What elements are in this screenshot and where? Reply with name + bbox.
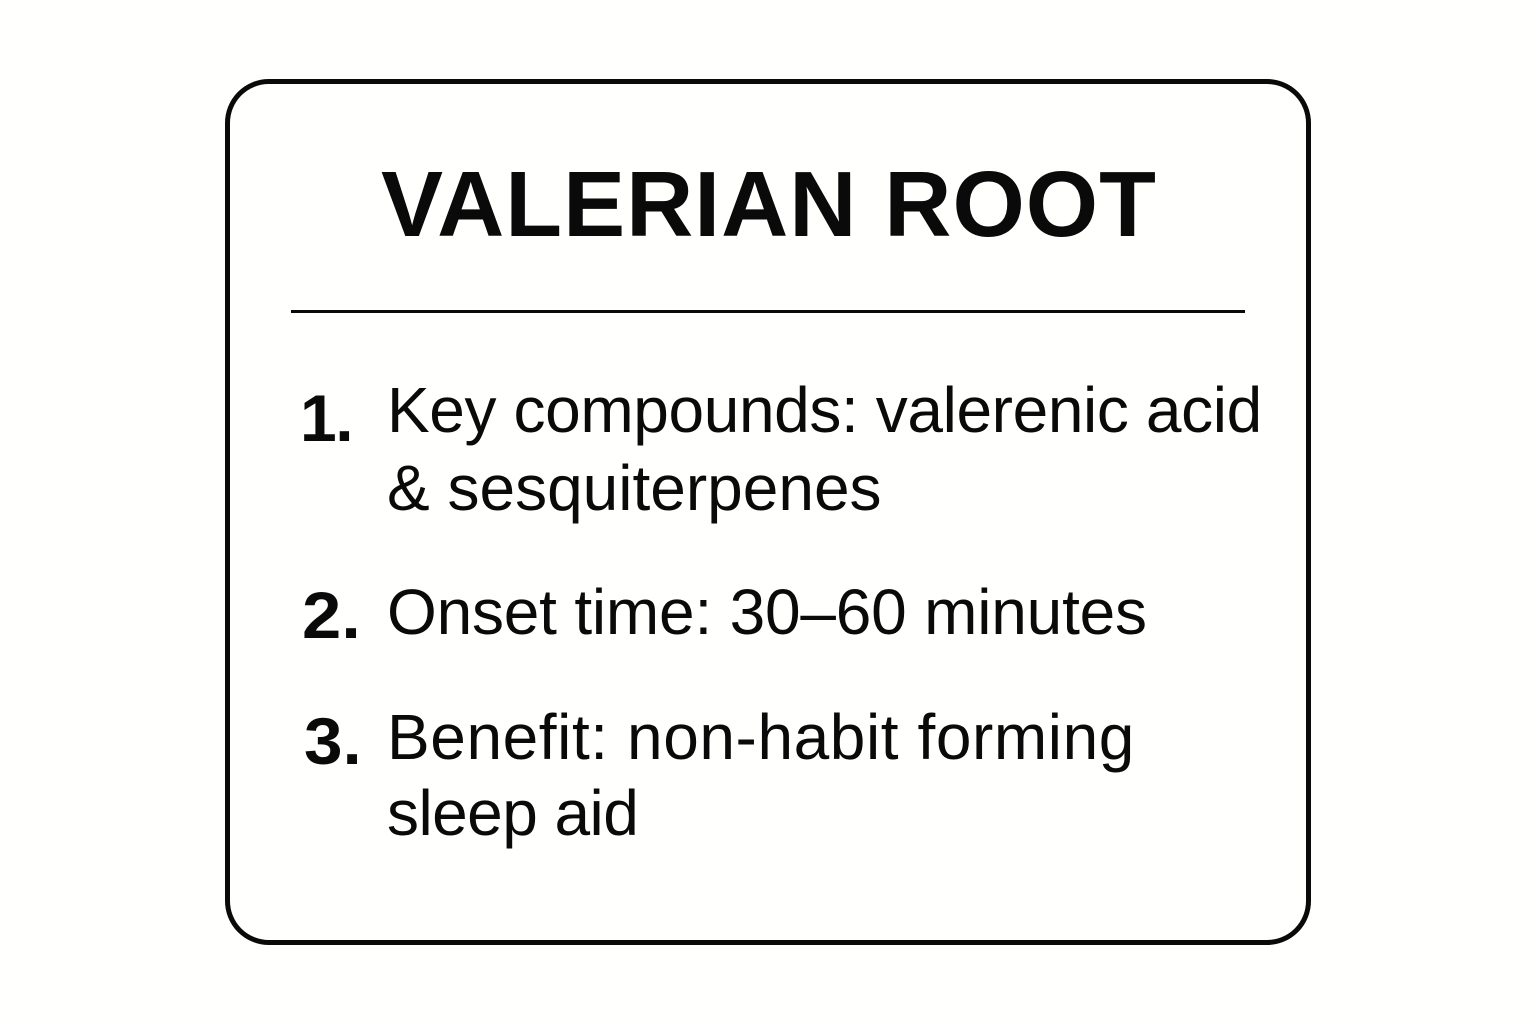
item 3 number: 3. <box>304 704 362 778</box>
panel: valerian root card <box>225 79 1311 945</box>
item 3 text line 2: sleep aid <box>387 777 638 849</box>
item 2 number: 2. <box>302 578 361 652</box>
title: VALERIAN ROOT <box>381 152 1157 256</box>
item 1 text line 2: & sesquiterpenes <box>387 452 882 524</box>
item 3 text: Benefit: non-habit forming <box>387 701 1135 773</box>
item 1 number: 1. <box>300 381 352 455</box>
item 2 text: Onset time: 30–60 minutes <box>387 576 1147 648</box>
item 1 text: Key compounds: valerenic acid <box>387 374 1262 446</box>
